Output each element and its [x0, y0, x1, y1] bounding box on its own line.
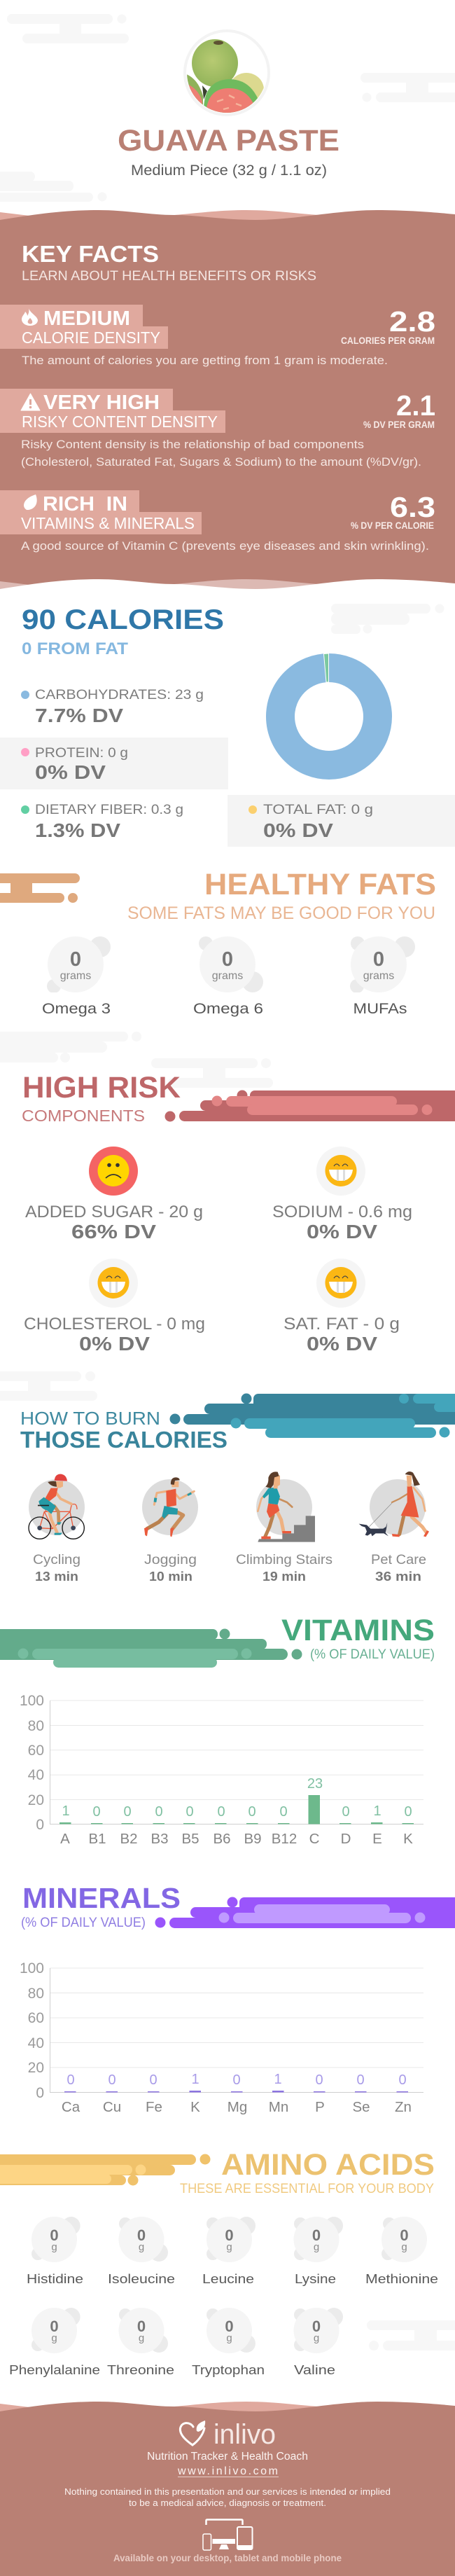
bar chart: vitamins: 0: [92, 1804, 101, 1820]
amino acid grid: g: [139, 2241, 144, 2253]
disclaimer: Nothing contained in this presentation and our services is intended or implied: [64, 2486, 391, 2497]
stat: omega 6: grams: [212, 970, 243, 982]
amino acid grid: 0: [137, 2227, 146, 2244]
duration: 36 min: [375, 1569, 421, 1584]
amino acid grid: Histidine: [27, 2271, 83, 2286]
bar chart: vitamins: 60: [28, 1743, 44, 1759]
legend: dietary fiber: DIETARY FIBER: 0.3 g: [35, 803, 183, 817]
amino acid grid: Tryptophan: [192, 2362, 265, 2377]
amino acid grid: Phenylalanine: [9, 2362, 100, 2377]
stat: mufas: grams: [363, 970, 394, 982]
bar chart: minerals: 0: [398, 2072, 407, 2088]
legend: protein: PROTEIN: 0 g: [35, 746, 128, 761]
unit: % DV PER CALORIE: [351, 520, 434, 531]
label: Jogging: [144, 1553, 197, 1567]
label: RICH IN: [43, 493, 127, 515]
panel: high risk components: [22, 1071, 455, 1355]
unit: CALORIES PER GRAM: [341, 335, 435, 346]
amino acid grid: g: [51, 2332, 57, 2344]
bar chart: vitamins: 40: [28, 1767, 44, 1783]
label: VERY HIGH: [43, 392, 160, 414]
activity: pet care: [359, 1471, 429, 1584]
bar chart: vitamins: 100: [20, 1693, 44, 1709]
panel: calories: [0, 604, 455, 847]
risk item: saturated fat: SAT. FAT - 0 g: [284, 1315, 400, 1334]
icon: jogger: [144, 1477, 194, 1537]
icon: devices: [203, 2520, 252, 2550]
legend: dietary fiber: [21, 803, 183, 841]
subheading: 0 FROM FAT: [22, 639, 128, 658]
availability note: Available on your desktop, tablet and mobile phone: [113, 2553, 342, 2563]
legend: total fat: TOTAL FAT: 0 g: [263, 803, 373, 817]
fact: very high risky content: [0, 389, 435, 469]
bar chart: minerals: Mg: [227, 2099, 247, 2115]
stat: omega 6: 0: [222, 948, 233, 971]
risk item: saturated fat: 0% DV: [307, 1333, 377, 1355]
value: 2.1: [396, 389, 435, 422]
bar chart: vitamins: A: [60, 1831, 70, 1847]
duration: 13 min: [35, 1569, 78, 1584]
amino acid grid: Isoleucine: [108, 2271, 175, 2286]
legend: carbohydrates: CARBOHYDRATES: 23 g: [35, 688, 204, 702]
disclaimer: to be a medical advice, diagnosis or treatment.: [129, 2498, 326, 2508]
label: MEDIUM: [43, 307, 130, 330]
amino acid grid: [9, 2217, 438, 2377]
bar chart: vitamins: 0: [217, 1804, 225, 1820]
bar chart: minerals: 0: [108, 2072, 116, 2088]
bar chart: minerals: Mn: [269, 2099, 288, 2115]
risk item: added sugar: 66% DV: [71, 1221, 156, 1242]
decorative blob: [165, 1090, 455, 1122]
icon: guava photo: [183, 29, 270, 116]
description: A good source of Vitamin C (prevents eye diseases and skin wrinkling).: [21, 540, 429, 553]
bar chart: vitamins: 1: [62, 1803, 70, 1819]
bar chart: vitamins: C: [309, 1831, 320, 1847]
panel: healthy fats: [0, 868, 436, 1017]
bar chart: minerals: Cu: [103, 2099, 121, 2115]
bar chart: minerals: 0: [232, 2072, 241, 2088]
panel: minerals: [20, 1882, 455, 2115]
amino acid grid: Valine: [294, 2362, 335, 2377]
amino acid grid: 0: [50, 2318, 59, 2335]
amino acid grid: g: [226, 2241, 232, 2253]
risk item: sodium: 0% DV: [307, 1221, 377, 1242]
heading: AMINO ACIDS: [221, 2148, 435, 2182]
bar chart: minerals: Zn: [395, 2099, 412, 2115]
risk item: cholesterol: [24, 1259, 205, 1355]
bar chart: minerals: Fe: [146, 2099, 162, 2115]
heading: HIGH RISK: [22, 1071, 181, 1105]
label line 2: CALORIE DENSITY: [22, 328, 160, 347]
risk item: saturated fat: [284, 1259, 400, 1355]
legend: carbohydrates: [21, 688, 204, 726]
bar chart: vitamins: K: [403, 1831, 413, 1847]
heading line 1: HOW TO BURN: [20, 1408, 160, 1429]
brand name: inlivo: [214, 2419, 276, 2450]
subheading: (% OF DAILY VALUE): [310, 1647, 435, 1662]
amino acid grid: Leucine: [202, 2271, 254, 2286]
duration: 19 min: [262, 1569, 306, 1584]
panel: how to burn calories: [20, 1394, 455, 1584]
description: (Cholesterol, Saturated Fat, Sugars & Sodium) to the amount (%DV/gr).: [21, 456, 421, 469]
amino acid grid: 0: [312, 2227, 321, 2244]
duration: 10 min: [149, 1569, 192, 1584]
donut chart: [280, 653, 378, 765]
bar chart: minerals: 80: [28, 1986, 44, 2002]
panel: amino acids: [0, 2148, 438, 2377]
bar chart: minerals: 0: [66, 2072, 75, 2088]
bar chart: vitamins: B2: [120, 1831, 138, 1847]
risk item: cholesterol: CHOLESTEROL - 0 mg: [24, 1315, 205, 1334]
header: food photo and title: [118, 29, 340, 179]
fact: medium calorie density: [0, 305, 435, 367]
icon: cyclist: [29, 1474, 84, 1539]
bar chart: vitamins: 0: [123, 1804, 132, 1820]
serving size: Medium Piece (32 g / 1.1 oz): [131, 162, 327, 179]
bar chart: vitamins: 80: [28, 1718, 44, 1734]
stat: omega 3: grams: [60, 970, 91, 982]
panel: footer: [0, 2402, 455, 2576]
label: Climbing Stairs: [236, 1553, 332, 1567]
bar chart: vitamins: 1: [373, 1803, 382, 1819]
heading line 2: THOSE CALORIES: [20, 1427, 227, 1453]
amino acid grid: 0: [225, 2318, 234, 2335]
legend: total fat: [227, 795, 455, 847]
icon: happy face: [316, 1259, 365, 1308]
description: Risky Content density is the relationship of bad components: [21, 438, 364, 451]
unit: % DV PER GRAM: [363, 420, 435, 430]
icon: happy face: [316, 1147, 365, 1196]
bar chart: minerals: Se: [352, 2099, 370, 2115]
title: GUAVA PASTE: [118, 124, 340, 158]
bar chart: minerals: [20, 1960, 424, 2115]
risk item: added sugar: ADDED SUGAR - 20 g: [25, 1203, 203, 1221]
bar chart: vitamins: 0: [404, 1804, 412, 1820]
bar chart: minerals: Ca: [62, 2099, 80, 2115]
bar chart: vitamins: [20, 1693, 424, 1847]
icon: dog walker: [359, 1471, 429, 1537]
amino acid grid: g: [226, 2332, 232, 2344]
bar chart: vitamins: B5: [181, 1831, 200, 1847]
bar chart: minerals: P: [315, 2099, 325, 2115]
bar chart: minerals: 0: [356, 2072, 365, 2088]
amino acid grid: g: [51, 2241, 57, 2253]
amino acid grid: 0: [137, 2318, 146, 2335]
amino acid grid: 0: [225, 2227, 234, 2244]
heading: VITAMINS: [281, 1614, 435, 1647]
label line 2: RISKY CONTENT DENSITY: [22, 413, 218, 431]
stat: omega 6: Omega 6: [193, 1001, 263, 1017]
bar chart: vitamins: 0: [186, 1804, 194, 1820]
amino acid grid: Methionine: [365, 2271, 438, 2286]
legend: protein: [0, 738, 228, 789]
amino acid grid: g: [139, 2332, 144, 2344]
bar chart: vitamins: B1: [88, 1831, 106, 1847]
decorative blob: [155, 1897, 455, 1928]
bar chart: minerals: 0: [315, 2072, 323, 2088]
heading: HEALTHY FATS: [204, 868, 436, 901]
heading: MINERALS: [22, 1882, 181, 1914]
bar chart: vitamins: 0: [36, 1817, 44, 1833]
bar chart: minerals: 100: [20, 1960, 44, 1976]
decorative blob: [0, 1629, 302, 1668]
bar chart: minerals: 1: [191, 2072, 200, 2087]
risk item: sodium: [272, 1147, 412, 1242]
decorative blob: [169, 1394, 455, 1438]
stat: omega 3: [42, 936, 111, 1017]
stat: mufas: [350, 936, 415, 1017]
fact: rich in vitamins and minerals: [0, 490, 435, 553]
bar chart: vitamins: B6: [213, 1831, 231, 1847]
bar chart: vitamins: B12: [272, 1831, 297, 1847]
panel: key facts: [0, 210, 455, 595]
value: 2.8: [389, 305, 435, 338]
bar chart: vitamins: 0: [342, 1804, 350, 1820]
tagline: Nutrition Tracker & Health Coach: [147, 2451, 308, 2463]
bar chart: minerals: 60: [28, 2010, 44, 2026]
subheading: COMPONENTS: [22, 1107, 145, 1125]
description: The amount of calories you are getting from 1 gram is moderate.: [22, 354, 388, 367]
bar chart: vitamins: B9: [244, 1831, 262, 1847]
bar chart: minerals: 20: [28, 2060, 44, 2076]
icon: inlivo heart logo: [180, 2421, 205, 2445]
legend: dietary fiber: 1.3% DV: [35, 819, 120, 841]
activity: cycling: [29, 1474, 85, 1584]
stat: omega 3: 0: [70, 948, 81, 971]
icon: happy face: [89, 1259, 138, 1308]
bar chart: minerals: 1: [274, 2072, 282, 2087]
panel: vitamins: [0, 1614, 435, 1847]
bar chart: minerals: 0: [36, 2085, 44, 2101]
amino acid grid: g: [401, 2241, 407, 2253]
label: Pet Care: [371, 1553, 426, 1567]
heading: KEY FACTS: [22, 241, 159, 267]
subheading: (% OF DAILY VALUE): [21, 1916, 146, 1930]
bar chart: vitamins: 0: [248, 1804, 256, 1820]
bar chart: vitamins: B3: [150, 1831, 169, 1847]
decorative blob: [0, 873, 80, 903]
label line 2: VITAMINS & MINERALS: [21, 514, 195, 532]
risk item: cholesterol: 0% DV: [79, 1333, 150, 1355]
icon: leaf: [24, 494, 37, 510]
bar chart: vitamins: D: [341, 1831, 351, 1847]
amino acid grid: Lysine: [295, 2271, 336, 2286]
icon: sad face: [89, 1147, 138, 1196]
risk item: added sugar: [25, 1147, 203, 1242]
subheading: THESE ARE ESSENTIAL FOR YOUR BODY: [180, 2181, 434, 2196]
subheading: LEARN ABOUT HEALTH BENEFITS OR RISKS: [22, 268, 316, 284]
disclaimer: [64, 2486, 391, 2508]
legend: total fat: 0% DV: [263, 819, 333, 841]
bar chart: vitamins: 23: [307, 1776, 323, 1792]
website: www.inlivo.com: [177, 2465, 278, 2477]
amino acid grid: 0: [312, 2318, 321, 2335]
decorative blob: [0, 2154, 210, 2185]
activity: climbing stairs: [236, 1471, 332, 1584]
icon: warning triangle: [21, 394, 40, 410]
stat: mufas: 0: [373, 948, 384, 971]
bar chart: minerals: K: [190, 2099, 200, 2115]
bar chart: minerals: 0: [149, 2072, 158, 2088]
amino acid grid: 0: [400, 2227, 409, 2244]
bar chart: minerals: 40: [28, 2035, 44, 2051]
bar chart: vitamins: E: [372, 1831, 382, 1847]
description: [21, 438, 421, 469]
bar chart: vitamins: 0: [279, 1804, 288, 1820]
stat: omega 6: [193, 936, 263, 1017]
bar chart: vitamins: 0: [155, 1804, 163, 1820]
amino acid grid: Threonine: [107, 2362, 174, 2377]
legend: carbohydrates: 7.7% DV: [35, 705, 123, 726]
icon: stair climber: [258, 1471, 315, 1542]
subheading: SOME FATS MAY BE GOOD FOR YOU: [127, 903, 435, 923]
amino acid grid: 0: [50, 2227, 59, 2244]
risk item: sodium: SODIUM - 0.6 mg: [272, 1203, 412, 1221]
stat: mufas: MUFAs: [353, 1001, 407, 1017]
icon: flame: [22, 308, 38, 326]
stat: omega 3: Omega 3: [42, 1001, 111, 1017]
amino acid grid: g: [314, 2332, 319, 2344]
amino acid grid: g: [314, 2241, 319, 2253]
activity: jogging: [142, 1477, 198, 1584]
heading: 90 CALORIES: [22, 604, 224, 635]
bar chart: vitamins: 20: [28, 1792, 44, 1808]
label: Cycling: [33, 1553, 80, 1567]
value: 6.3: [390, 491, 435, 523]
legend: protein: 0% DV: [35, 761, 106, 783]
